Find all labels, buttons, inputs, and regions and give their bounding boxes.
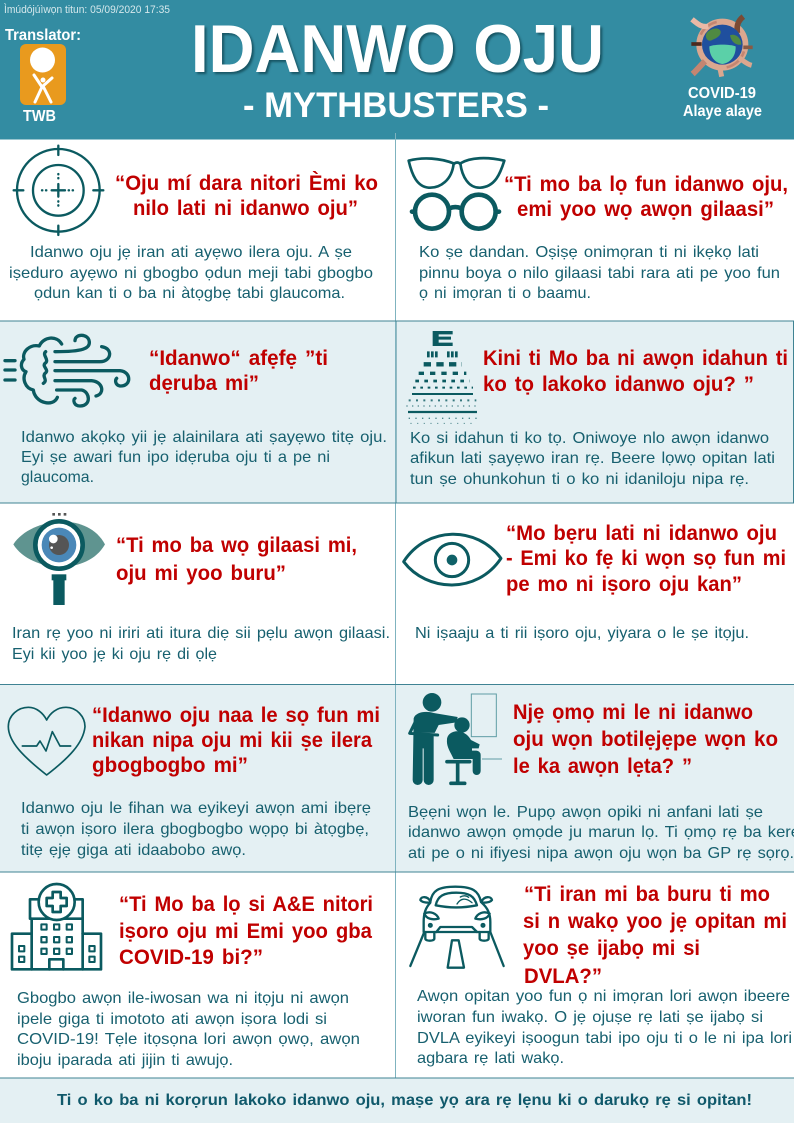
body text: ati pe o ni ifiyesi nipa awọn oju wọn ba GP rẹ sọrọ. [408, 845, 794, 862]
icon: car on road [410, 887, 504, 968]
heading: pe mo ni iṣoro oju kan” [506, 572, 742, 596]
body text: Ni iṣaaju a ti rii iṣoro oju, yiyara o le ṣe itọju. [415, 625, 749, 642]
heading: oju wọn botilẹjẹpe wọn ko [513, 727, 778, 751]
heading: le ka awọn lẹta? ” [513, 754, 692, 778]
heading [513, 700, 778, 778]
body text: DVLA eyikeyi iṣoogun tabi ipo oju ti o le ni ipa lori [417, 1030, 792, 1047]
body text: agbara rẹ lati wakọ. [417, 1050, 564, 1067]
heading: Njẹ ọmọ mi le ni idanwo [513, 700, 753, 724]
heading [523, 882, 787, 988]
body text: pinnu boya o nilo gilaasi tabi rara ati pe yoo fun [419, 265, 780, 282]
icon: eye outline [404, 534, 501, 585]
TWB label: TWB [23, 108, 56, 125]
heading [116, 533, 357, 585]
icon: TWB logo [20, 44, 66, 105]
panel: general health question [0, 684, 396, 872]
COVID-19 label: COVID-19 [688, 85, 756, 102]
heading: dẹruba mi” [149, 371, 259, 395]
icon: eye chart [406, 331, 479, 423]
icon: glasses [409, 158, 504, 229]
body text: Idanwo akọkọ yii jẹ alainilara ati ṣayẹwo titẹ oju. [21, 429, 387, 446]
heading: “Oju mí dara nitori Èmi ko [115, 170, 378, 195]
heading [504, 172, 788, 221]
Alaye alaye label: Alaye alaye [683, 103, 762, 120]
icon: optician with child [410, 693, 502, 785]
heading: “Ti Mo ba lọ si A&E nitori [119, 892, 373, 916]
body text [408, 804, 794, 862]
icon: eye in magnifying glass [13, 514, 105, 605]
icon: heart with pulse [8, 707, 85, 775]
translator label: Translator: [5, 27, 81, 44]
body text: Ko ṣe dandan. Oṣiṣẹ onimọran ti ni ikẹkọ lati [419, 244, 759, 261]
panel: afraid of eye test myth [396, 503, 794, 684]
body text [21, 429, 387, 486]
body text: Idanwo oju jẹ iran ati ayẹwo ilera oju. A ṣe [30, 244, 352, 261]
panel: A&E question [0, 872, 396, 1078]
heading: iṣoro oju mi Emi yoo gba [119, 919, 372, 943]
body text: COVID-19! Tẹle itọsọna lori awọn ọwọ, awọn [17, 1031, 360, 1048]
subtitle: - MYTHBUSTERS - [243, 86, 549, 125]
heading: nikan nipa oju mi kii ṣe ilera [92, 728, 372, 752]
body text: Iran rẹ yoo ni iriri ati itura diẹ sii pẹlu awọn gilaasi. [12, 625, 390, 642]
panel: air puff myth [0, 321, 396, 503]
panel: eye looks fine myth [0, 140, 395, 320]
body text: ti awọn iṣoro ilera gbogbogbo wọpọ bi àtọgbẹ, [21, 821, 369, 838]
heading: ko tọ lakoko idanwo oju? ” [483, 372, 754, 396]
footer banner: Ti o ko ba ni korọrun lakoko idanwo oju, maṣe yọ ara rẹ lẹnu ki o darukọ rẹ si opitan! [57, 1092, 752, 1109]
icon: air puff and brain [5, 335, 129, 406]
panel: glasses worsen eyes myth [0, 503, 395, 684]
body text [17, 990, 360, 1069]
heading: DVLA?” [524, 964, 602, 988]
body text: ọ ni imọran ti o baamu. [419, 285, 591, 302]
heading: si n wakọ yoo jẹ opitan mi [523, 909, 787, 933]
body text: tun ṣe ohunkohun ti o ko ni idaniloju nipa rẹ. [410, 471, 749, 488]
heading [119, 892, 373, 969]
icon: hands around masked globe [691, 17, 753, 77]
body text: Ko si idahun ti ko tọ. Oniwoye nlo awọn idanwo [410, 430, 769, 447]
body text [21, 800, 371, 859]
body text [417, 988, 792, 1067]
footer banner [0, 1078, 794, 1123]
heading: nilo lati ni idanwo oju” [133, 196, 358, 220]
heading: COVID-19 bi?” [119, 945, 263, 969]
heading [506, 521, 786, 596]
body text: Idanwo oju le fihan wa eyikeyi awọn ami ibẹrẹ [21, 800, 371, 817]
heading: “Idanwo oju naa le sọ fun mi [92, 703, 380, 727]
header band [0, 0, 794, 140]
body text [419, 244, 780, 302]
body text: idanwo awọn ọmọde ju marun lọ. Ti ọmọ rẹ ba kere [408, 824, 794, 841]
body text: ipele giga ti imototo ati awọn iṣora lodi si [17, 1011, 327, 1028]
body text: iboju iparada ati jijin ti awujọ. [17, 1052, 233, 1069]
body text: iworan fun iwakọ. O jẹ ojuṣe rẹ lati ṣe ijabọ si [417, 1009, 763, 1026]
heading [483, 346, 788, 396]
panel: wrong answers question [396, 321, 794, 503]
body text [9, 244, 373, 302]
heading: “Ti iran mi ba buru ti mo [524, 882, 770, 906]
heading [149, 346, 328, 395]
body text: Awọn opitan yoo fun ọ ni imọran lori awọn ibeere [417, 988, 790, 1005]
last updated timestamp: Ìmúdójúìwọn titun: 05/09/2020 17:35 [4, 3, 170, 16]
heading [92, 703, 380, 777]
heading: “Ti mo ba wọ gilaasi mi, [116, 533, 357, 557]
body text: Eyi kii yoo jẹ ki oju rẹ di ọlẹ [12, 646, 217, 663]
panel: driving question [396, 872, 794, 1078]
body text: afikun lati ṣayẹwo iran rẹ. Beere lọwọ opitan lati [410, 450, 775, 467]
body text: Bẹẹni wọn le. Pupọ awọn opiki ni anfani lati ṣe [408, 804, 763, 821]
body text: iṣeduro ayẹwo ni gbogbo ọdun meji tabi gbogbo [9, 265, 373, 282]
icon: hospital [12, 884, 101, 969]
title: IDANWO OJU [191, 11, 604, 87]
heading: gbogbogbo mi” [92, 753, 248, 777]
panel: glasses myth [396, 140, 794, 320]
heading: “Idanwo“ afẹfẹ ”ti [149, 346, 328, 370]
body text: Gbogbo awọn ile-iwosan wa ni itọju ni awọn [17, 990, 349, 1007]
body text [12, 625, 390, 663]
body text: Eyi ṣe awari fun ipo idẹruba oju ti a pe ni [21, 449, 330, 466]
icon: target [14, 146, 103, 235]
heading: “Mo bẹru lati ni idanwo oju [506, 521, 777, 545]
body text: glaucoma. [21, 469, 94, 486]
panel: child eye test question [396, 684, 794, 872]
heading: emi yoo wọ awọn gilaasi” [517, 197, 774, 221]
body text: ọdun kan ti o ba ni àtọgbẹ tabi glaucoma. [34, 285, 345, 302]
heading: yoo ṣe ijabọ mi si [523, 936, 700, 960]
body text: titẹ ẹjẹ giga ati idaabobo awọ. [21, 842, 246, 859]
heading [115, 170, 378, 220]
heading: oju mi yoo buru” [116, 561, 286, 585]
body text [410, 430, 775, 488]
